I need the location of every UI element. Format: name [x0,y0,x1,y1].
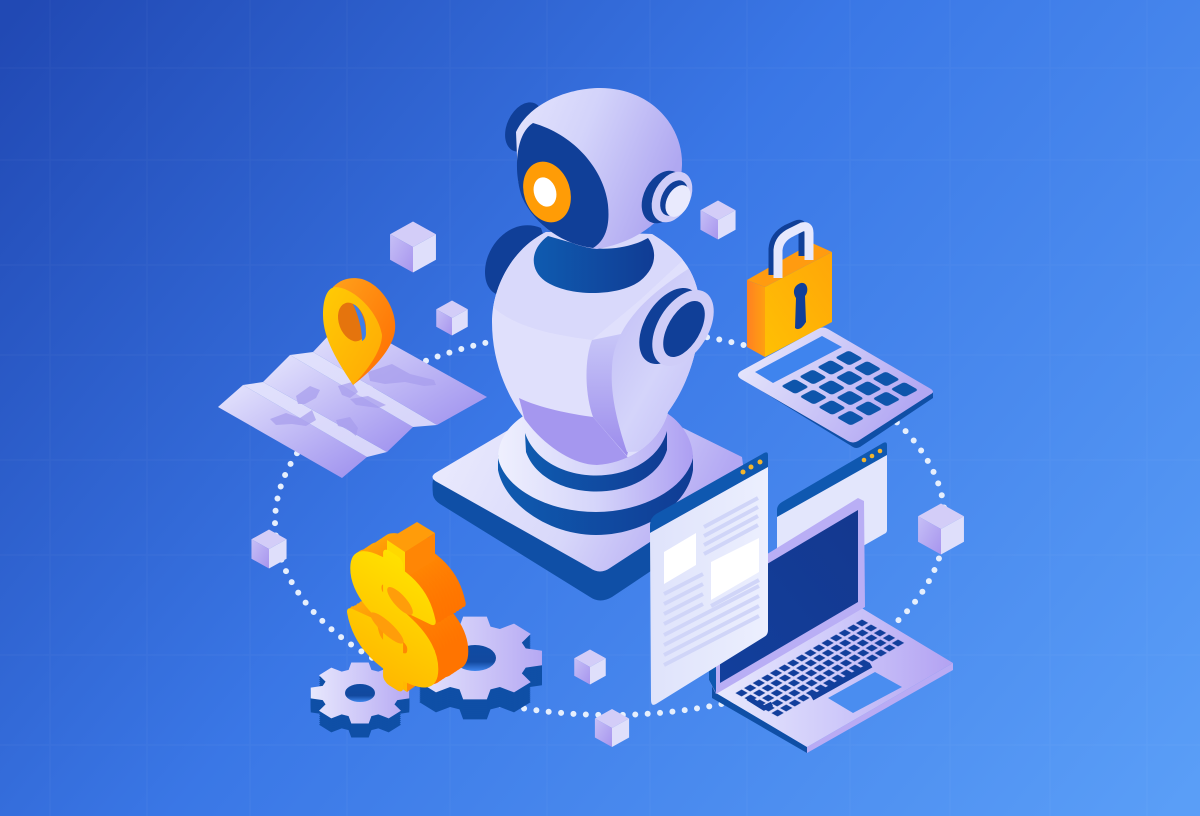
robot back ear [498,96,550,158]
cube 1 [390,222,436,272]
dollar extrusion: $ [360,503,443,724]
dollar extrusion: $ [375,494,458,715]
dollar front face: $ [351,508,434,729]
map continents [270,364,436,436]
robot pedestal [498,412,693,535]
dollar extrusion: $ [366,499,449,720]
dollar extrusion: $ [378,492,461,713]
cube 2 [436,300,468,336]
back browser window [777,442,887,560]
map location pin [323,278,395,385]
padlock keyhole [794,283,807,329]
robot body [492,232,698,465]
dollar extrusion: $ [357,505,440,726]
robot [432,88,745,600]
robot right ear [633,163,701,231]
gears [311,617,542,738]
laptop touchpad [828,672,902,713]
dotted orbit ring [275,329,945,715]
laptop [709,498,953,753]
cube 5 [918,504,964,554]
padlock [747,224,832,357]
cube 3 [700,200,736,240]
robot arm joint [627,277,726,377]
window image blocks [664,533,759,600]
large gear [408,617,542,719]
laptop lid [709,498,865,694]
cube 6 [574,650,606,684]
small gear [311,662,409,738]
robot base plate [432,380,745,600]
calculator screen [755,336,842,383]
dollar extrusion: $ [381,490,464,711]
dollar extrusion: $ [372,496,455,717]
floating cubes [251,200,964,747]
folded world map [218,318,487,478]
laptop base [712,607,953,753]
window text lines [664,498,759,665]
window control dots [740,460,762,474]
dollar counters [367,584,417,647]
robot face visor [517,123,608,248]
dollar extrusion: $ [354,506,437,727]
laptop keyboard [733,618,907,718]
calculator keys [777,348,923,428]
dollar extrusion: $ [369,498,452,719]
robot left shoulder [485,225,545,294]
laptop space bar [748,665,871,708]
dollar sign [351,490,464,729]
robot neck [534,236,654,293]
dollar stem stubs [387,522,435,692]
front browser window [650,452,768,705]
robot head [516,88,701,249]
cube 7 [595,709,629,747]
cube 4 [251,530,287,568]
back window dots [862,449,882,462]
dollar extrusion: $ [363,501,446,722]
robot eye [516,155,578,229]
padlock shackle [773,224,809,278]
calculator [738,328,933,448]
